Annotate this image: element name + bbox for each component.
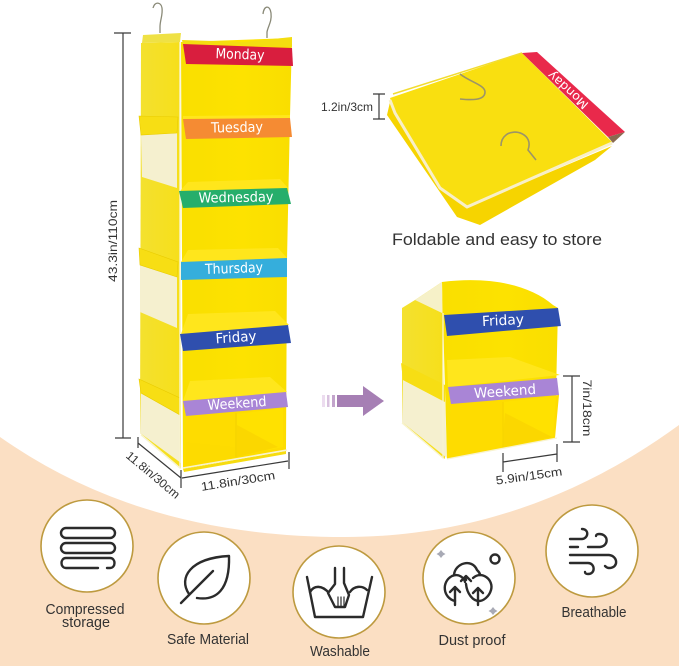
label: Friday short: Friday bbox=[482, 312, 524, 330]
short side pocket bbox=[402, 380, 447, 458]
arrow: purple bbox=[322, 386, 384, 416]
caption: foldable: Foldable and easy to store bbox=[392, 230, 602, 249]
height dimension: 43.3in/110cm bbox=[106, 200, 120, 282]
label: Friday: Friday bbox=[215, 329, 257, 347]
caption: dust proof: Dust proof bbox=[438, 633, 506, 649]
caption: storage: storage bbox=[62, 615, 110, 631]
icon: wash tub and hand bbox=[307, 568, 372, 617]
icon: leaf bbox=[181, 556, 229, 603]
label: Tuesday: Tuesday bbox=[210, 120, 263, 136]
organizer front body bbox=[181, 38, 292, 469]
height dimension bbox=[106, 33, 131, 438]
label: Monday: Monday bbox=[215, 46, 265, 64]
side pocket bottom bbox=[140, 393, 181, 463]
label: Wednesday bbox=[179, 188, 291, 208]
label: Wednesday: Wednesday bbox=[198, 189, 274, 207]
label: Weekend short: Weekend bbox=[474, 382, 537, 402]
side pocket top bbox=[141, 133, 177, 188]
icon: folded hook lower bbox=[501, 132, 536, 160]
shelf height dimension: 7in/18cm bbox=[580, 380, 594, 436]
side top flap bbox=[142, 33, 181, 43]
bottom cubbies bbox=[183, 407, 286, 472]
cream fold edge bbox=[390, 100, 612, 207]
short side flap bbox=[401, 363, 445, 402]
thickness dimension: 1.2in/3cm bbox=[321, 100, 373, 114]
icon: right hanger hook bbox=[263, 7, 271, 38]
short cream edging bbox=[402, 313, 557, 459]
feature: breathable bbox=[546, 505, 638, 621]
cream edging bbox=[141, 42, 287, 468]
top edge stitching bbox=[393, 53, 522, 94]
label: Tuesday bbox=[183, 118, 292, 139]
red Monday strip: Monday bbox=[545, 68, 591, 112]
caption: washable: Washable bbox=[310, 644, 370, 660]
cubby width dimension bbox=[495, 444, 563, 488]
caption: safe material: Safe Material bbox=[167, 632, 249, 648]
icon: left hanger hook bbox=[153, 3, 162, 33]
shelves bbox=[180, 115, 290, 401]
feature: safe material bbox=[158, 532, 250, 648]
icon: dust specks bbox=[436, 550, 498, 615]
short side panel bbox=[402, 282, 445, 459]
short folded organizer bbox=[401, 280, 561, 459]
label: Weekend bbox=[183, 392, 288, 416]
feature: washable bbox=[293, 546, 385, 660]
feature: dust proof bbox=[423, 532, 515, 649]
width dimension bbox=[182, 452, 289, 494]
width dimension: 11.8in/30cm bbox=[200, 468, 276, 494]
short shelf bbox=[447, 357, 560, 387]
label: Friday bbox=[180, 325, 291, 351]
red Monday strip bbox=[522, 52, 625, 143]
depth dimension: 11.8in/30cm bbox=[123, 448, 183, 502]
label: Friday short bbox=[444, 308, 561, 336]
folded underside bbox=[387, 102, 612, 225]
label: Weekend short bbox=[448, 378, 559, 404]
short cubbies bbox=[447, 395, 559, 459]
label: Thursday: Thursday bbox=[204, 260, 263, 278]
label: Thursday bbox=[181, 258, 287, 280]
front top flap bbox=[182, 37, 292, 47]
short front body bbox=[442, 280, 558, 459]
tall hanging organizer bbox=[139, 3, 293, 472]
side pocket middle bbox=[140, 265, 177, 328]
label: Monday bbox=[183, 44, 293, 66]
folded organizer bbox=[387, 52, 625, 225]
label: Weekend: Weekend bbox=[207, 394, 267, 414]
feature: compressed storage bbox=[41, 500, 133, 631]
thickness dimension bbox=[321, 94, 385, 119]
side flaps bbox=[139, 116, 180, 415]
peach background band bbox=[0, 425, 679, 666]
icon: coils bbox=[61, 528, 115, 568]
shelf height dimension bbox=[563, 376, 594, 442]
caption: breathable: Breathable bbox=[562, 605, 626, 621]
folded top face bbox=[390, 53, 612, 207]
icon: wind bbox=[570, 529, 616, 574]
organizer side panel bbox=[140, 42, 181, 468]
cream corner bbox=[415, 282, 442, 313]
icon: folded hook upper bbox=[460, 74, 485, 100]
cubby width dimension: 5.9in/15cm bbox=[495, 464, 563, 488]
icon: dust clouds and arrows bbox=[445, 554, 500, 605]
caption: compressed: Compressed bbox=[46, 602, 124, 618]
